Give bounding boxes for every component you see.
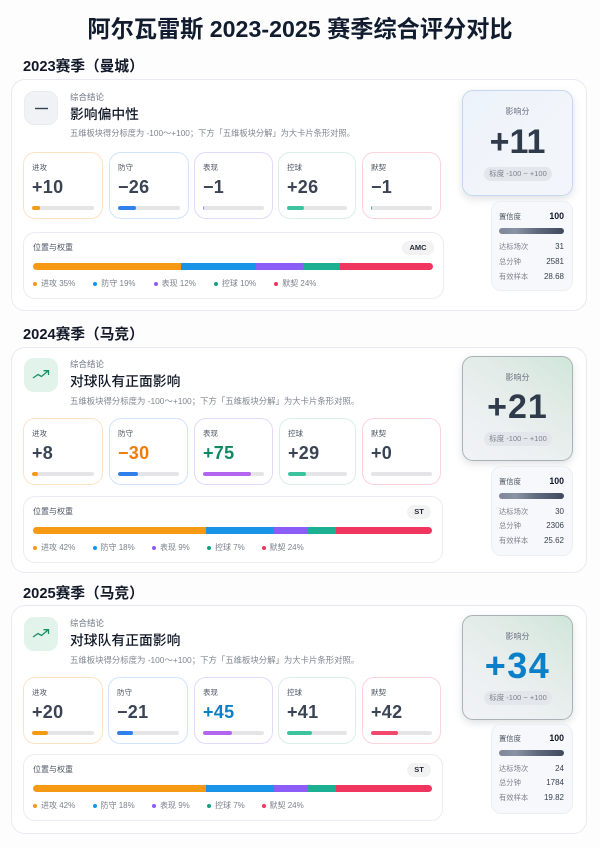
panel: position and weights: 位置与权重 [33,765,73,774]
panel: position and weights: 防守 18% [100,801,135,810]
panel: position and weights: 表现 9% [160,801,190,810]
score card: 标度 -100 ~ +100 [489,693,547,702]
panel: confidence: 31 [555,242,564,251]
card: defense [108,677,188,744]
card: defense: −26 [118,177,149,197]
card: chemistry: 默契 [371,688,386,696]
panel: confidence [491,724,573,814]
score card: 影响分 [506,373,530,382]
panel: position and weights: 默契 24% [282,279,316,288]
conclusion headline: 影响偏中性 [70,107,139,122]
card: attack: 进攻 [32,162,47,172]
card: defense: −30 [118,443,149,463]
card: chemistry: 默契 [371,428,386,438]
card: chemistry [362,418,441,485]
panel: confidence: 24 [555,764,564,773]
card: attack: +10 [32,177,63,197]
heading: 2023 season: 2023赛季（曼城） [23,59,144,75]
panel: confidence: 2581 [546,257,564,266]
score card: 影响分 [506,107,530,116]
card: attack: 进攻 [32,428,47,438]
card: possession [279,418,356,485]
score card: 影响分 [506,632,530,641]
panel: confidence: 总分钟 [499,521,521,530]
card: chemistry [362,152,441,219]
note: 五维板块得分标度为 -100～+100；下方「五维板块分解」为大卡片条形对照。 [70,655,359,665]
card: performance: +45 [203,702,234,722]
panel: position and weights: 控球 10% [222,279,256,288]
card: possession: +41 [287,702,318,722]
label: conclusion: 综合结论 [70,359,104,369]
card: attack [23,152,103,219]
card: possession: +29 [288,443,319,463]
panel: 2023 season [11,79,587,311]
panel: confidence: 置信度 [499,477,521,486]
card: performance [194,152,273,219]
card: possession: 控球 [288,428,303,438]
panel: confidence: 100 [549,476,564,486]
card: attack: +20 [32,702,63,722]
panel: position and weights [23,232,444,299]
card: chemistry: −1 [371,177,392,197]
panel: confidence: 28.68 [544,272,564,281]
card: defense: −21 [117,702,148,722]
panel: position and weights: 控球 7% [215,543,245,552]
panel: confidence: 有效样本 [499,272,528,281]
card: attack [23,418,103,485]
card: attack: +8 [32,443,53,463]
card: performance: +75 [203,443,234,463]
panel: position and weights: 默契 24% [270,801,304,810]
panel: confidence [491,201,573,291]
panel: confidence: 置信度 [499,734,521,743]
card: defense: 防守 [118,428,133,438]
note: 五维板块得分标度为 -100～+100；下方「五维板块分解」为大卡片条形对照。 [70,129,355,138]
panel: position and weights: AMC [409,243,427,252]
score card [462,356,573,461]
icon: neutral dash [24,91,58,125]
card: chemistry: 默契 [371,162,386,172]
conclusion headline: 对球队有正面影响 [70,374,180,389]
card: defense [109,418,188,485]
panel: confidence: 25.62 [544,536,564,545]
card: attack: 进攻 [32,688,47,696]
card: defense [109,152,189,219]
card: possession: +26 [287,177,318,197]
panel: position and weights: 防守 19% [101,279,136,288]
panel: position and weights: 位置与权重 [33,243,73,252]
score card [462,615,573,720]
card: possession [278,152,356,219]
panel: position and weights [23,754,443,821]
panel: 2025 season [11,605,587,834]
score card: +11 [490,123,545,161]
panel: confidence: 有效样本 [499,536,528,545]
card: defense: 防守 [118,162,133,172]
note: 五维板块得分标度为 -100～+100；下方「五维板块分解」为大卡片条形对照。 [70,396,359,406]
card: performance [194,418,273,485]
label: conclusion: 综合结论 [70,618,104,628]
card: attack [23,677,103,744]
panel: position and weights: 位置与权重 [33,507,73,516]
panel: confidence: 有效样本 [499,793,528,802]
panel: confidence: 100 [549,211,564,221]
card: performance: 表现 [203,428,218,438]
icon: trending up [24,358,58,392]
panel: confidence: 达标场次 [499,242,528,251]
panel: confidence: 达标场次 [499,764,528,773]
panel: confidence: 总分钟 [499,257,521,266]
panel: confidence [491,466,573,556]
panel: 2024 season [11,347,587,573]
icon: trending up [24,617,58,651]
card: performance: 表现 [203,162,218,172]
panel: position and weights [23,496,443,563]
panel: position and weights: 进攻 42% [41,543,75,552]
panel: position and weights: 控球 7% [215,801,245,810]
panel: confidence: 1784 [546,778,564,787]
panel: confidence: 达标场次 [499,507,528,516]
card: defense: 防守 [117,688,132,696]
panel: position and weights: 表现 9% [160,543,190,552]
panel: confidence: 30 [555,507,564,516]
card: possession [278,677,356,744]
panel: position and weights: ST [414,507,424,516]
panel: confidence: 置信度 [499,212,521,221]
card: possession: 控球 [287,162,302,172]
card: chemistry [362,677,441,744]
panel: position and weights: 进攻 35% [41,279,75,288]
score card: +34 [485,645,550,686]
score card: +21 [487,388,548,426]
conclusion headline: 对球队有正面影响 [70,633,180,648]
card: possession: 控球 [287,688,302,696]
title: 阿尔瓦雷斯 2023-2025 赛季综合评分对比 [87,16,513,42]
panel: position and weights: 默契 24% [270,543,304,552]
panel: confidence: 19.82 [544,793,564,802]
panel: confidence: 2306 [546,521,564,530]
score card: 标度 -100 ~ +100 [489,434,547,443]
panel: position and weights: 表现 12% [162,279,196,288]
card: performance: 表现 [203,688,218,696]
panel: position and weights: 防守 18% [100,543,135,552]
heading: 2025 season: 2025赛季（马竞） [23,586,144,602]
score card [462,90,573,196]
panel: position and weights: ST [414,765,424,774]
card: performance: −1 [203,177,224,197]
card: performance [194,677,273,744]
panel: confidence: 100 [549,733,564,743]
panel: confidence: 总分钟 [499,778,521,787]
heading: 2024 season: 2024赛季（马竞） [23,327,144,343]
card: chemistry: +42 [371,702,402,722]
card: chemistry: +0 [371,443,392,463]
label: conclusion: 综合结论 [70,92,104,102]
score card: 标度 -100 ~ +100 [489,169,547,178]
panel: position and weights: 进攻 42% [41,801,75,810]
